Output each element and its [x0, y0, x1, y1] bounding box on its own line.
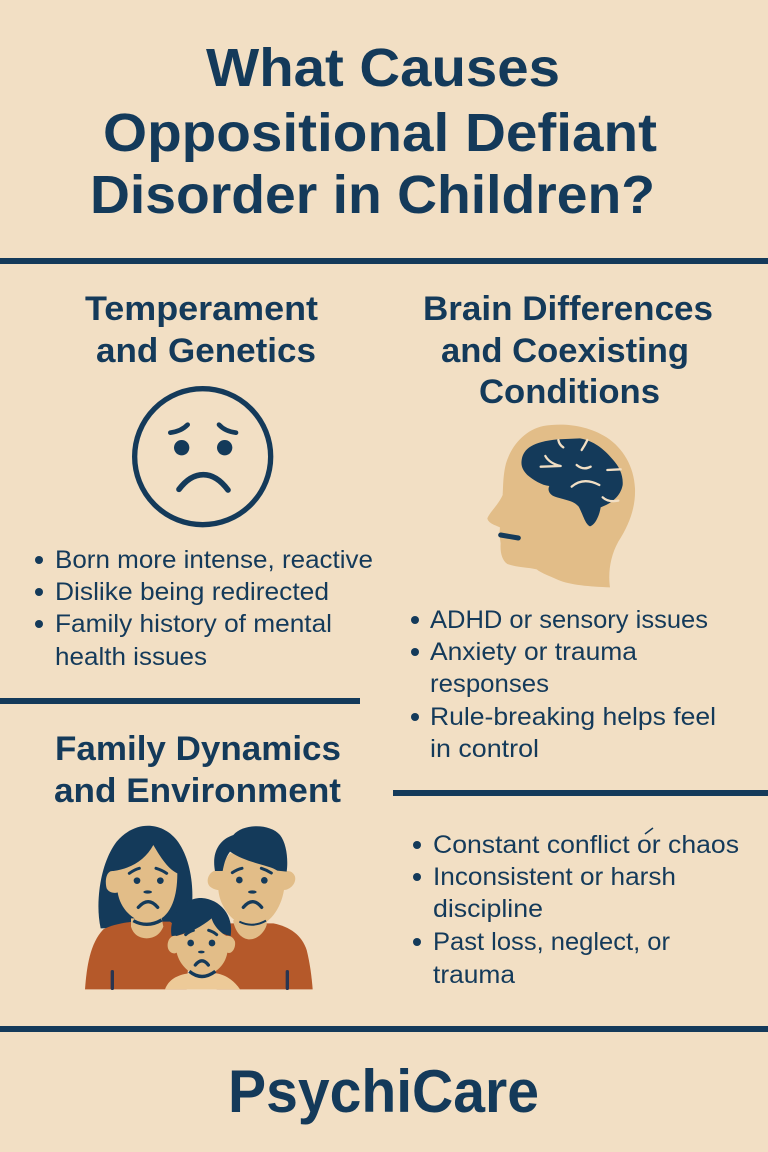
heading: family dynamics — [54, 730, 341, 810]
heading: brain differences: Conditions — [479, 373, 660, 411]
heading: temperament and genetics — [85, 290, 318, 370]
bullet list: brain: Rule-breaking helps feel — [430, 703, 716, 731]
heading: temperament and genetics: and Genetics — [96, 332, 316, 370]
bullet list: family: discipline — [433, 895, 543, 923]
bullet list: family — [413, 828, 739, 989]
bullet list: temperament — [35, 546, 373, 671]
bullet list: temperament: Born more intense, reactive — [55, 546, 373, 574]
heading: brain differences — [423, 290, 713, 411]
bullet list: family: Inconsistent or harsh — [433, 863, 676, 891]
title: Disorder in Children? — [90, 165, 655, 225]
heading: family dynamics: Family Dynamics — [55, 730, 341, 768]
title — [90, 38, 657, 225]
title: Oppositional Defiant — [103, 103, 657, 163]
bullet list: temperament: Family history of mental — [55, 610, 332, 638]
bullet list: family: trauma — [433, 961, 515, 989]
heading: temperament and genetics: Temperament — [85, 290, 318, 328]
heading: family dynamics: and Environment — [54, 772, 341, 810]
title: What Causes — [206, 38, 560, 98]
heading: brain differences: Brain Differences — [423, 290, 713, 328]
footer brand: PsychiCare — [228, 1058, 539, 1125]
heading: brain differences: and Coexisting — [441, 332, 689, 370]
panel: family dynamics and environment — [54, 730, 739, 989]
bullet list: brain: in control — [430, 735, 539, 763]
bullet list: temperament: Dislike being redirected — [55, 578, 329, 606]
bullet list: brain — [411, 606, 716, 763]
panel: temperament and genetics — [35, 290, 373, 671]
bullet list: brain: ADHD or sensory issues — [430, 606, 708, 634]
icon: head with brain — [487, 425, 635, 587]
bullet list: family: Constant conflict or chaos — [433, 831, 739, 859]
bullet list: brain: Anxiety or trauma — [430, 638, 637, 666]
bullet list: brain: responses — [430, 670, 549, 698]
icon: sad face — [135, 389, 271, 525]
bullet list: family: Past loss, neglect, or — [433, 928, 670, 956]
panel: brain differences and coexisting conditions — [411, 290, 716, 763]
icon: sad family — [85, 826, 313, 989]
bullet list: temperament: health issues — [55, 643, 207, 671]
